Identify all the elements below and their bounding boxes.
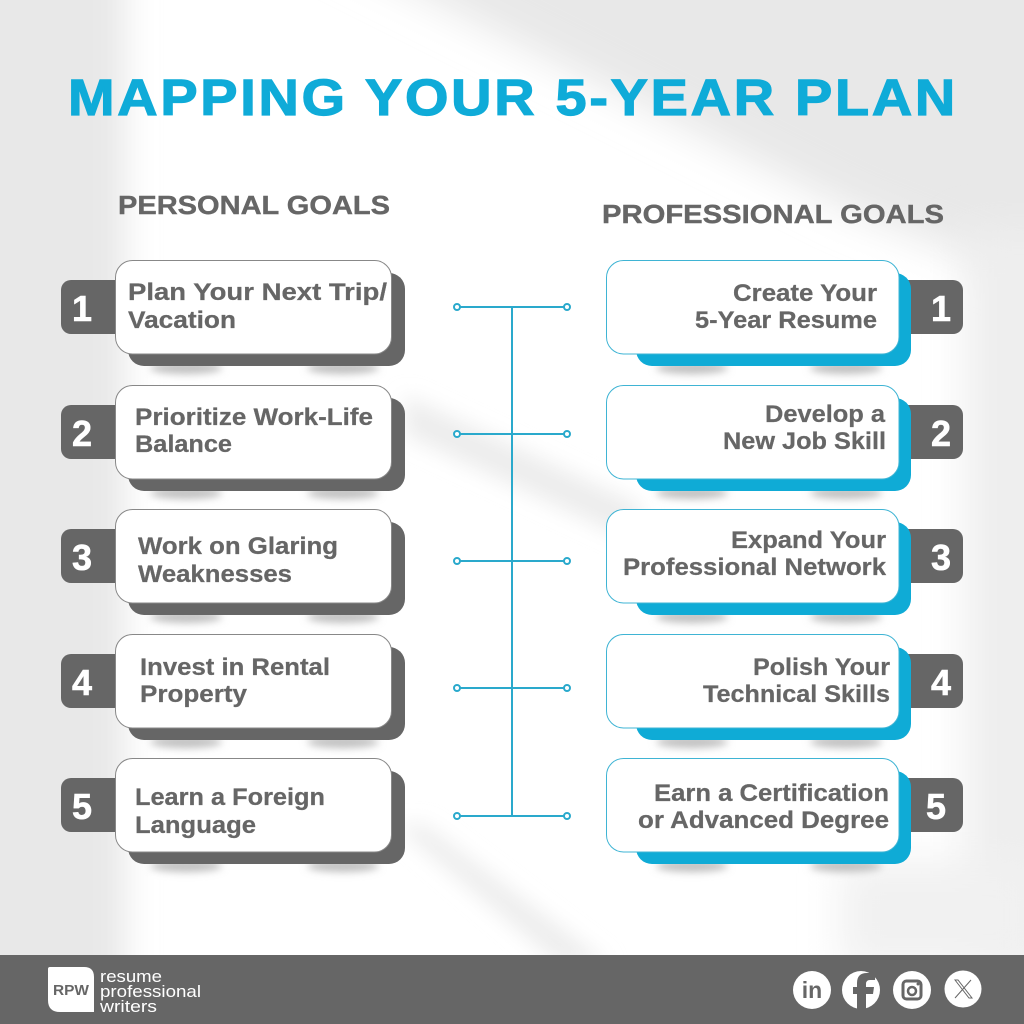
panel: personal goal 4 bbox=[61, 634, 405, 748]
panel: professional goal 1: 5-Year Resume bbox=[695, 307, 877, 334]
footer bar bbox=[0, 955, 1024, 1024]
logo: RPW bbox=[53, 982, 90, 999]
panel: personal goal 2: Prioritize Work-Life bbox=[135, 404, 373, 431]
panel: professional goal 2: Develop a bbox=[765, 401, 886, 428]
title: MAPPING YOUR 5-YEAR PLAN bbox=[68, 69, 958, 126]
panel: personal goal 5: Language bbox=[135, 812, 256, 839]
panel: personal goal 4: Invest in Rental bbox=[140, 654, 330, 681]
connector timeline bbox=[454, 304, 570, 819]
panel: professional goal 1 bbox=[606, 260, 963, 374]
icon: instagram bbox=[893, 971, 931, 1009]
panel: professional goal 1: Create Your bbox=[733, 280, 877, 307]
panel: professional goal 2 bbox=[606, 386, 963, 499]
panel: professional goal 2: New Job Skill bbox=[723, 428, 886, 455]
logo: resume bbox=[100, 967, 162, 986]
heading: professional goals: PROFESSIONAL GOALS bbox=[602, 199, 944, 229]
panel: personal goal 3: 3 bbox=[72, 537, 92, 578]
panel: professional goal 5 bbox=[606, 758, 963, 872]
panel: professional goal 4: Technical Skills bbox=[703, 681, 890, 708]
panel: personal goal 4: Property bbox=[140, 681, 248, 708]
panel: professional goal 5: or Advanced Degree bbox=[638, 807, 889, 834]
panel: personal goal 5: 5 bbox=[72, 786, 92, 827]
icon: linkedin: in bbox=[802, 977, 822, 1003]
logo: professional bbox=[100, 982, 201, 1001]
panel: professional goal 4: 4 bbox=[931, 662, 951, 703]
heading: personal goals: PERSONAL GOALS bbox=[118, 190, 390, 220]
panel: professional goal 2: 2 bbox=[931, 413, 951, 454]
panel: professional goal 3: Expand Your bbox=[731, 527, 886, 554]
panel: personal goal 1: Plan Your Next Trip/ bbox=[128, 279, 387, 306]
logo bbox=[48, 967, 201, 1016]
panel: personal goal 3: Work on Glaring bbox=[138, 533, 338, 560]
panel: personal goal 4: 4 bbox=[72, 662, 92, 703]
panel: professional goal 3: Professional Network bbox=[623, 554, 887, 581]
panel: personal goal 2 bbox=[61, 386, 405, 499]
panel: professional goal 5: 5 bbox=[926, 786, 946, 827]
panel: personal goal 2: 2 bbox=[72, 413, 92, 454]
panel: personal goal 5 bbox=[61, 758, 405, 872]
icon: linkedin bbox=[793, 971, 831, 1009]
panel: personal goal 2: Balance bbox=[135, 431, 232, 458]
panel: personal goal 3 bbox=[61, 510, 405, 623]
panel: personal goal 5: Learn a Foreign bbox=[135, 784, 325, 811]
panel: professional goal 1: 1 bbox=[931, 288, 951, 329]
panel: professional goal 3 bbox=[606, 510, 963, 623]
panel: professional goal 4: Polish Your bbox=[753, 654, 890, 681]
panel: personal goal 1: Vacation bbox=[128, 307, 236, 334]
panel: professional goal 3: 3 bbox=[931, 537, 951, 578]
panel: personal goal 1 bbox=[61, 260, 405, 374]
icon: x bbox=[944, 970, 982, 1008]
icon: facebook bbox=[842, 971, 880, 1009]
panel: personal goal 3: Weaknesses bbox=[138, 561, 292, 588]
panel: professional goal 4 bbox=[606, 634, 963, 748]
panel: personal goal 1: 1 bbox=[72, 288, 92, 329]
panel: professional goal 5: Earn a Certification bbox=[654, 780, 889, 807]
logo: writers bbox=[99, 997, 157, 1016]
